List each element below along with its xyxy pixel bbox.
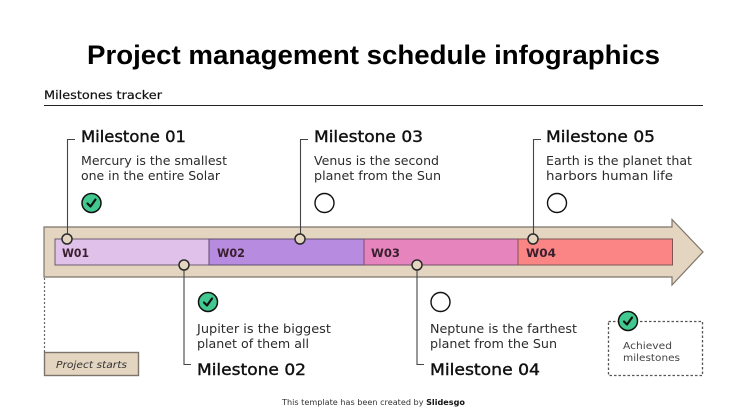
project start dotted connector [44,278,46,352]
milestone 02: Jupiter is the biggest [196,322,331,336]
project starts label [44,352,138,376]
week 1 bar [55,239,209,265]
milestone 04: Neptune is the farthest [430,322,577,336]
section heading: milestones tracker: Milestones tracker [44,88,162,102]
legend: achieved milestones: Achieved [623,341,672,352]
milestone 01: Mercury is the smallest [81,154,227,168]
milestone 05: harbors human life [546,169,673,183]
week 3 bar [364,239,518,265]
project starts label: Project starts [56,360,127,371]
week 4 bar [518,239,672,265]
milestone 02: Milestone 02 [197,360,306,379]
footer credit: This template has been created by Slidesgo [281,398,465,407]
legend: achieved milestones [608,312,702,376]
milestone 04: Milestone 04 [430,360,540,379]
title: Project management schedule infographics [87,40,660,70]
week 2 bar [209,239,364,265]
week 2 bar: W02 [217,246,245,260]
week 4 bar: W04 [526,246,556,260]
milestone 05: Milestone 05 [546,127,655,146]
milestone 04 [412,260,577,379]
milestone 01: one in the entire Solar [81,169,220,183]
timeline arrow [44,220,703,285]
milestone 01: Milestone 01 [81,127,186,146]
milestone 05: Earth is the planet that [546,154,692,168]
milestone 01 [62,127,227,244]
milestone 03: Venus is the second [314,154,439,168]
milestone 03: planet from the Sun [314,169,441,183]
legend: achieved milestones: milestones [623,353,680,364]
week bars [55,239,672,265]
week 3 bar: W03 [371,246,400,260]
milestone 03 [295,127,441,244]
milestone 05 [528,127,692,244]
milestone 02: planet of them all [197,337,309,351]
week 1 bar: W01 [62,246,89,260]
milestone 02 [179,260,331,379]
milestone 03: Milestone 03 [314,127,423,146]
milestone 04: planet from the Sun [430,337,557,351]
